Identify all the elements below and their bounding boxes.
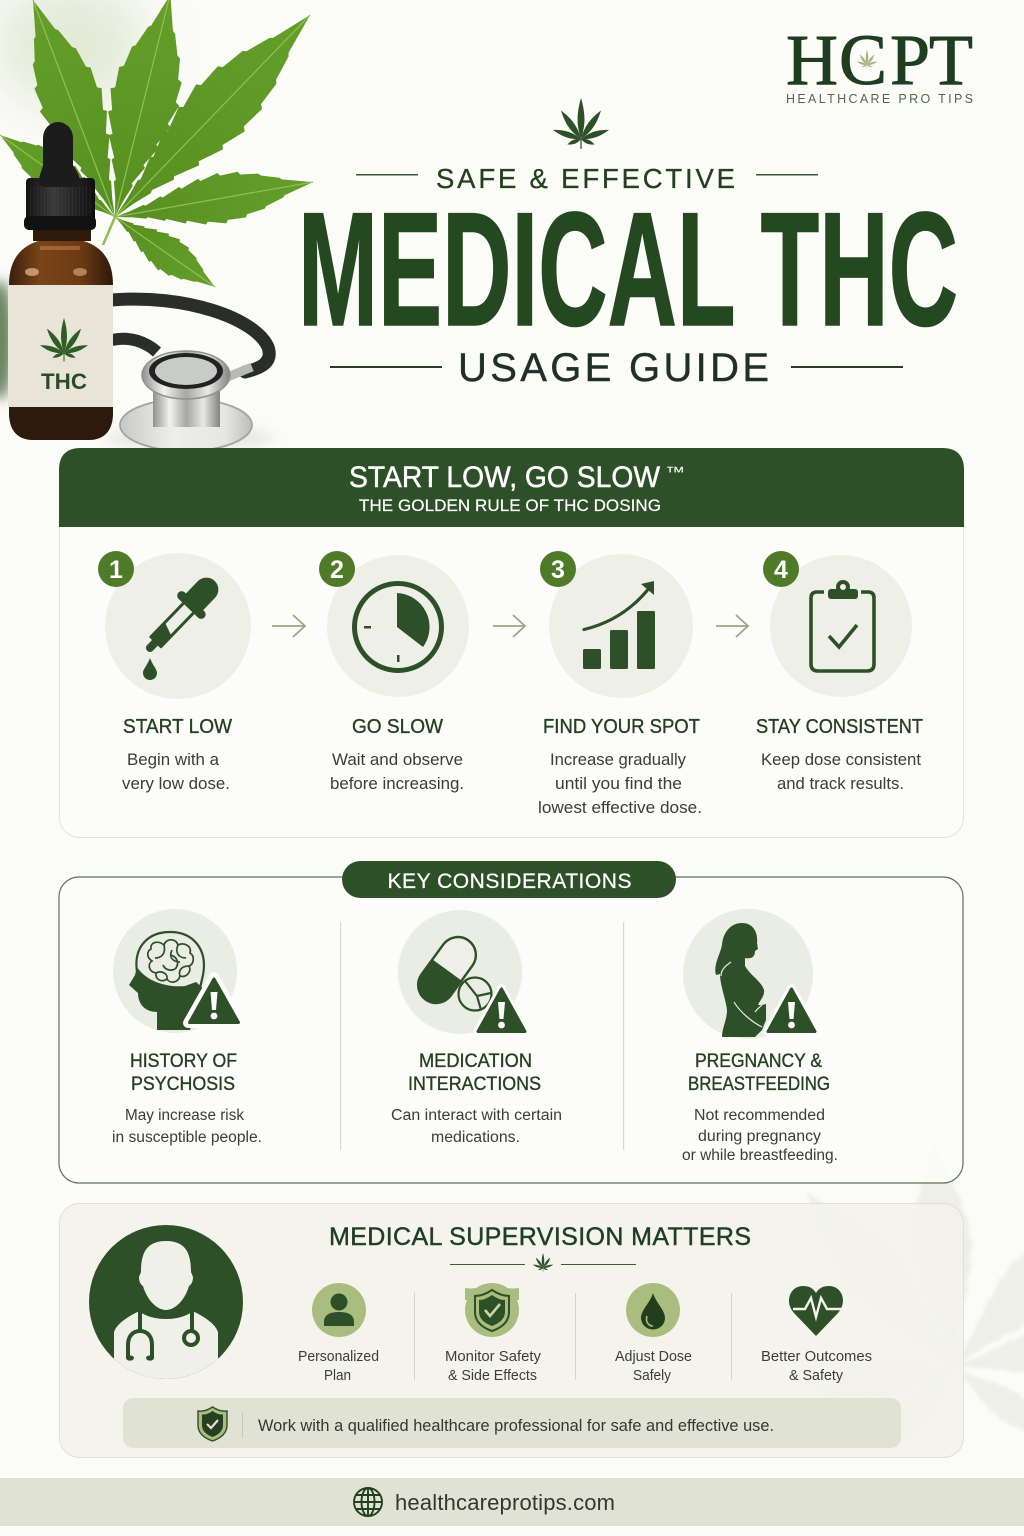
badge 4: 4 xyxy=(774,556,788,584)
step 2: go slow: Wait and observe xyxy=(332,750,463,769)
heading divider with leaf xyxy=(450,1253,636,1272)
item: medication interactions: INTERACTIONS xyxy=(408,1073,541,1095)
heading: MEDICAL SUPERVISION MATTERS xyxy=(329,1223,751,1251)
step 3: find your spot xyxy=(538,551,702,817)
badge 1: 1 xyxy=(109,556,123,584)
footer: healthcareprotips.com xyxy=(395,1490,615,1515)
arrow 3 to 4 xyxy=(716,615,748,637)
item: better outcomes: & Safety xyxy=(789,1367,843,1384)
badge 2: 2 xyxy=(330,556,344,584)
item: history of psychosis xyxy=(112,909,262,1146)
badge 2 xyxy=(319,551,355,587)
panel: medical supervision matters xyxy=(60,1204,964,1458)
item: history of psychosis: May increase risk xyxy=(125,1107,244,1124)
step 3: find your spot: until you find the xyxy=(555,774,682,793)
step 3: find your spot: Increase gradually xyxy=(550,750,686,769)
icon: head with brain xyxy=(129,932,205,1030)
step 3: find your spot: FIND YOUR SPOT xyxy=(543,716,700,738)
item: pregnancy and breastfeeding: Not recommended xyxy=(694,1107,825,1124)
panel header: THE GOLDEN RULE OF THC DOSING xyxy=(359,496,661,515)
badge 3 xyxy=(540,551,576,587)
item: personalized plan: Plan xyxy=(324,1367,351,1384)
item: medication interactions: MEDICATION xyxy=(419,1050,532,1072)
panel header xyxy=(59,448,964,527)
overline: safe and effective: SAFE & EFFECTIVE xyxy=(436,163,735,194)
item: better outcomes: Better Outcomes xyxy=(761,1348,872,1365)
icon: capsule and tablet xyxy=(411,930,492,1010)
step 4: stay consistent xyxy=(756,551,923,793)
icon: warning triangle xyxy=(477,988,526,1032)
item: history of psychosis: HISTORY OF xyxy=(130,1050,237,1072)
icon: doctor xyxy=(89,1225,243,1390)
arrow 2 to 3 xyxy=(493,615,525,637)
badge 3: 3 xyxy=(551,556,565,584)
icon: shield xyxy=(198,1407,227,1441)
cannabis leaf xyxy=(0,0,314,288)
item: adjust dose: Safely xyxy=(633,1367,671,1384)
dropper bottle xyxy=(8,122,113,440)
item: medication interactions xyxy=(391,910,562,1146)
icon: logo leaf xyxy=(856,50,878,69)
step 4: stay consistent: Keep dose consistent xyxy=(761,750,921,769)
step 4: stay consistent: and track results. xyxy=(777,774,904,793)
icon: dropper xyxy=(134,568,228,680)
step 2: go slow: before increasing. xyxy=(330,774,464,793)
panel: start low, go slow xyxy=(59,448,964,838)
icon: leaf on label xyxy=(39,318,89,361)
item: adjust dose xyxy=(615,1283,692,1384)
item: history of psychosis: in susceptible people. xyxy=(112,1129,262,1146)
panel header: START LOW, GO SLOW xyxy=(349,461,660,494)
item: history of psychosis: PSYCHOSIS xyxy=(131,1073,235,1095)
item: monitor safety: & Side Effects xyxy=(448,1367,537,1384)
step 1: start low: very low dose. xyxy=(122,774,230,793)
icon: warning triangle xyxy=(188,977,240,1023)
step 1: start low: START LOW xyxy=(123,716,232,738)
pill heading: KEY CONSIDERATIONS xyxy=(388,870,632,893)
footer xyxy=(0,1478,1024,1526)
step 2: go slow: GO SLOW xyxy=(352,716,443,738)
item: personalized plan: Personalized xyxy=(298,1348,379,1365)
panel header: ™ xyxy=(665,464,685,481)
callout: work with a professional: Work with a qualified healthcare professional for safe and effective use. xyxy=(258,1416,774,1435)
item: personalized plan xyxy=(298,1283,379,1384)
icon: warning triangle xyxy=(767,988,816,1032)
item: pregnancy and breastfeeding: or while breastfeeding. xyxy=(682,1147,838,1164)
badge 4 xyxy=(763,551,799,587)
item: medication interactions: Can interact with certain xyxy=(391,1107,562,1124)
item: monitor safety: Monitor Safety xyxy=(445,1348,541,1365)
pill heading xyxy=(342,861,676,898)
icon: clock xyxy=(354,584,442,670)
icon: clipboard xyxy=(811,580,874,671)
item: medication interactions: medications. xyxy=(431,1129,520,1146)
step 1: start low xyxy=(98,551,251,793)
item: pregnancy and breastfeeding: BREASTFEEDING xyxy=(688,1073,830,1095)
step 2: go slow xyxy=(319,551,469,793)
item: monitor safety xyxy=(445,1283,541,1384)
callout: work with a professional xyxy=(123,1398,901,1448)
subtitle: usage guide: USAGE GUIDE xyxy=(458,346,769,390)
bottle label THC: THC xyxy=(41,369,87,394)
icon: rising bars xyxy=(583,581,655,669)
stethoscope xyxy=(112,299,269,451)
item: adjust dose: Adjust Dose xyxy=(615,1348,692,1365)
step 3: find your spot: lowest effective dose. xyxy=(538,798,702,817)
item: pregnancy and breastfeeding xyxy=(682,909,838,1164)
step 4: stay consistent: STAY CONSISTENT xyxy=(756,716,923,738)
item: pregnancy and breastfeeding: PREGNANCY & xyxy=(695,1050,822,1072)
icon: globe xyxy=(354,1488,382,1516)
item: better outcomes xyxy=(761,1286,872,1384)
hero photo: leaf, THC bottle and stethoscope xyxy=(0,0,335,451)
icon: title leaf xyxy=(552,98,610,149)
logo: HCPT: HEALTHCARE PRO TIPS xyxy=(786,92,973,106)
step 1: start low: Begin with a xyxy=(127,750,220,769)
icon: pregnant woman xyxy=(715,923,766,1037)
badge 1 xyxy=(98,551,134,587)
background watermark leaf xyxy=(782,1135,1024,1462)
logo: HCPT: HCPT xyxy=(786,20,973,100)
panel: key considerations xyxy=(59,861,963,1183)
arrow 1 to 2 xyxy=(272,615,305,637)
title block xyxy=(298,98,958,390)
item: pregnancy and breastfeeding: during pregnancy xyxy=(698,1128,821,1145)
